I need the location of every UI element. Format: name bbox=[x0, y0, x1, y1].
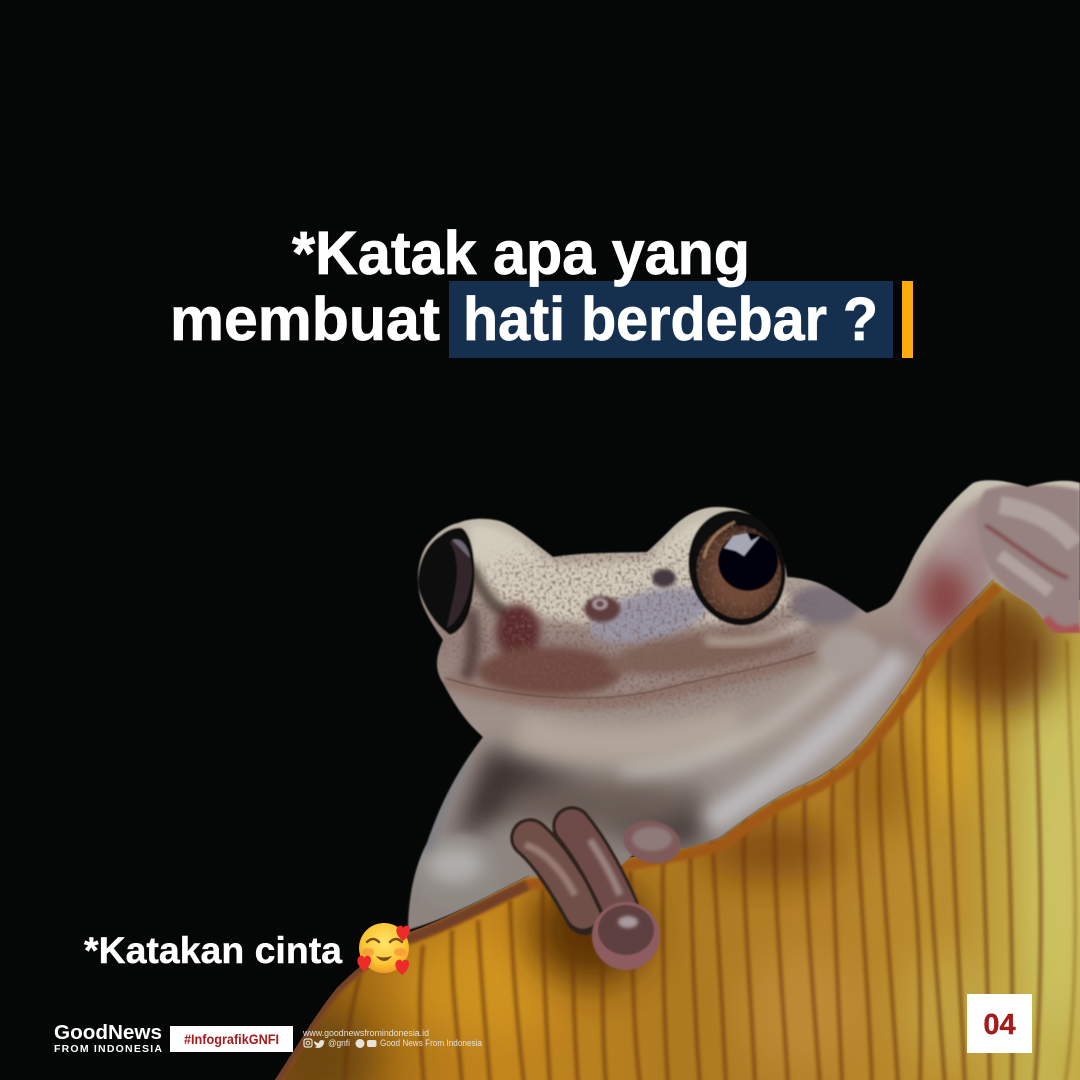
frog face grey blue patch bbox=[588, 584, 710, 646]
leaf light and shadow areas bbox=[280, 590, 1080, 1080]
frog right eye bbox=[687, 510, 786, 626]
title line 2 highlighted: hati berdebar ? bbox=[463, 285, 878, 353]
logo: GoodNews From Indonesia: GoodNews bbox=[54, 1022, 162, 1044]
title line 1: *Katak apa yang bbox=[292, 219, 750, 287]
hashtag badge: #InfografikGNFI bbox=[184, 1031, 279, 1047]
social links: @gnfi bbox=[328, 1038, 350, 1048]
frog nostril bbox=[584, 569, 676, 622]
hashtag badge bbox=[170, 1026, 293, 1052]
photo: yellow leaf with veins bbox=[275, 580, 1080, 1080]
frog arm left bbox=[448, 831, 484, 901]
social links bbox=[302, 1028, 482, 1048]
frog throat folds bbox=[520, 642, 900, 822]
icon: twitter bbox=[314, 1040, 325, 1048]
frog left eye bbox=[418, 528, 474, 635]
social links: Good News From Indonesia bbox=[380, 1038, 482, 1048]
photo: frog body and head bbox=[405, 480, 1080, 970]
leaf rim bbox=[275, 586, 998, 1080]
frog foreleg right bbox=[911, 494, 991, 646]
social links: www.goodnewsfromindonesia.id bbox=[302, 1028, 429, 1038]
frog shoulder bbox=[790, 585, 880, 674]
logo: GoodNews From Indonesia: FROM INDONESIA bbox=[54, 1043, 162, 1055]
answer text: *Katakan cinta bbox=[84, 930, 342, 971]
icon: smiling face with hearts emoji bbox=[357, 923, 410, 975]
title highlight box bbox=[449, 281, 893, 358]
title line 2 left: membuat bbox=[170, 285, 440, 353]
page number badge: 04 bbox=[983, 1009, 1016, 1041]
leaf veins bbox=[345, 600, 1075, 1080]
icon: facebook bbox=[356, 1039, 364, 1048]
frog highlights below eye bbox=[705, 620, 805, 642]
title accent bar bbox=[902, 281, 913, 358]
frog hand right bbox=[978, 484, 1080, 634]
title: question text bbox=[170, 219, 913, 358]
frog mouth band bbox=[445, 655, 815, 702]
page number badge bbox=[967, 994, 1032, 1053]
frog hand front with toes bbox=[525, 826, 660, 970]
icon: youtube bbox=[367, 1040, 376, 1047]
frog head top bbox=[470, 519, 790, 625]
frog lower body shadow bbox=[455, 745, 700, 850]
frog toe pad small bbox=[619, 815, 685, 869]
frog skin speckle bbox=[431, 532, 817, 716]
icon: instagram bbox=[304, 1039, 312, 1047]
logo: GoodNews From Indonesia bbox=[54, 1022, 162, 1055]
frog snout red brown patch bbox=[465, 565, 797, 697]
